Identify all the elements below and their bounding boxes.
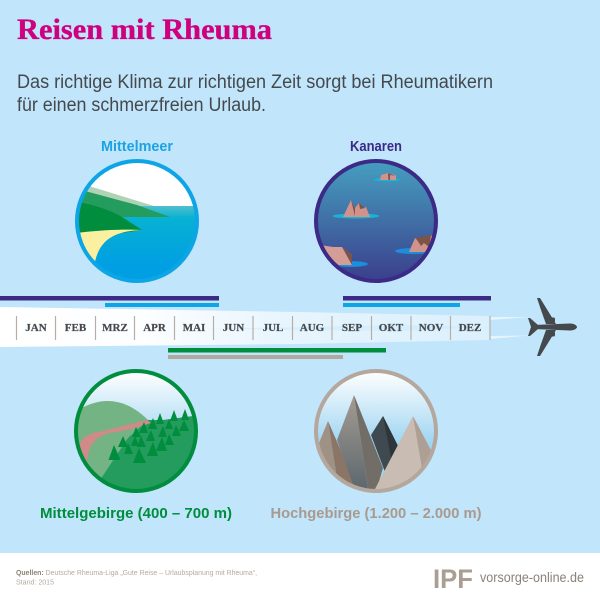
month labels: DEZ xyxy=(459,322,481,334)
icon: Kanaren islands xyxy=(316,161,436,281)
logo: IPF xyxy=(433,564,473,594)
bar: Mittelmeer spring xyxy=(105,303,219,307)
intro text xyxy=(17,72,493,116)
month labels: JUL xyxy=(263,322,283,334)
bar: Kanaren right xyxy=(343,296,491,300)
bar: Mittelgebirge xyxy=(168,348,386,352)
month labels xyxy=(25,322,481,334)
label: Mittelmeer: Mittelmeer xyxy=(101,139,173,155)
month labels: MRZ xyxy=(102,322,128,334)
icon: airplane xyxy=(528,298,577,356)
timeline strip xyxy=(0,307,530,347)
month labels: MAI xyxy=(183,322,205,334)
footer panel xyxy=(0,553,600,600)
sources: Stand: 2015 xyxy=(16,580,54,586)
icon: Hochgebirge mountains xyxy=(310,371,436,495)
bar: Kanaren left xyxy=(0,296,219,300)
bar: Mittelmeer autumn xyxy=(343,303,460,307)
label: Kanaren: Kanaren xyxy=(350,139,402,155)
month labels: JAN xyxy=(25,322,47,334)
month labels: APR xyxy=(143,322,167,334)
logo xyxy=(433,564,584,594)
logo: vorsorge-online.de xyxy=(480,569,584,585)
month labels: NOV xyxy=(419,322,443,334)
intro text: Das richtige Klima zur richtigen Zeit sorgt bei Rheumatikern xyxy=(17,72,493,93)
sources xyxy=(16,570,257,586)
title: Reisen mit Rheuma xyxy=(17,13,272,46)
month labels: JUN xyxy=(223,322,244,334)
sources: Quellen: Deutsche Rheuma-Liga „Gute Reise – Urlaubsplanung mit Rheuma“, xyxy=(16,570,257,577)
icon: Mittelgebirge forest xyxy=(76,371,200,500)
label: Hochgebirge: Hochgebirge (1.200 – 2.000 m) xyxy=(270,505,482,522)
intro text: für einen schmerzfreien Urlaub. xyxy=(17,95,266,116)
month labels: FEB xyxy=(65,322,87,334)
month labels: OKT xyxy=(379,322,404,334)
label: Mittelgebirge: Mittelgebirge (400 – 700 m) xyxy=(40,505,232,522)
bar: Hochgebirge xyxy=(168,355,343,359)
icon: Mittelmeer coast xyxy=(70,161,205,286)
month labels: AUG xyxy=(300,322,325,334)
month labels: SEP xyxy=(342,322,362,334)
